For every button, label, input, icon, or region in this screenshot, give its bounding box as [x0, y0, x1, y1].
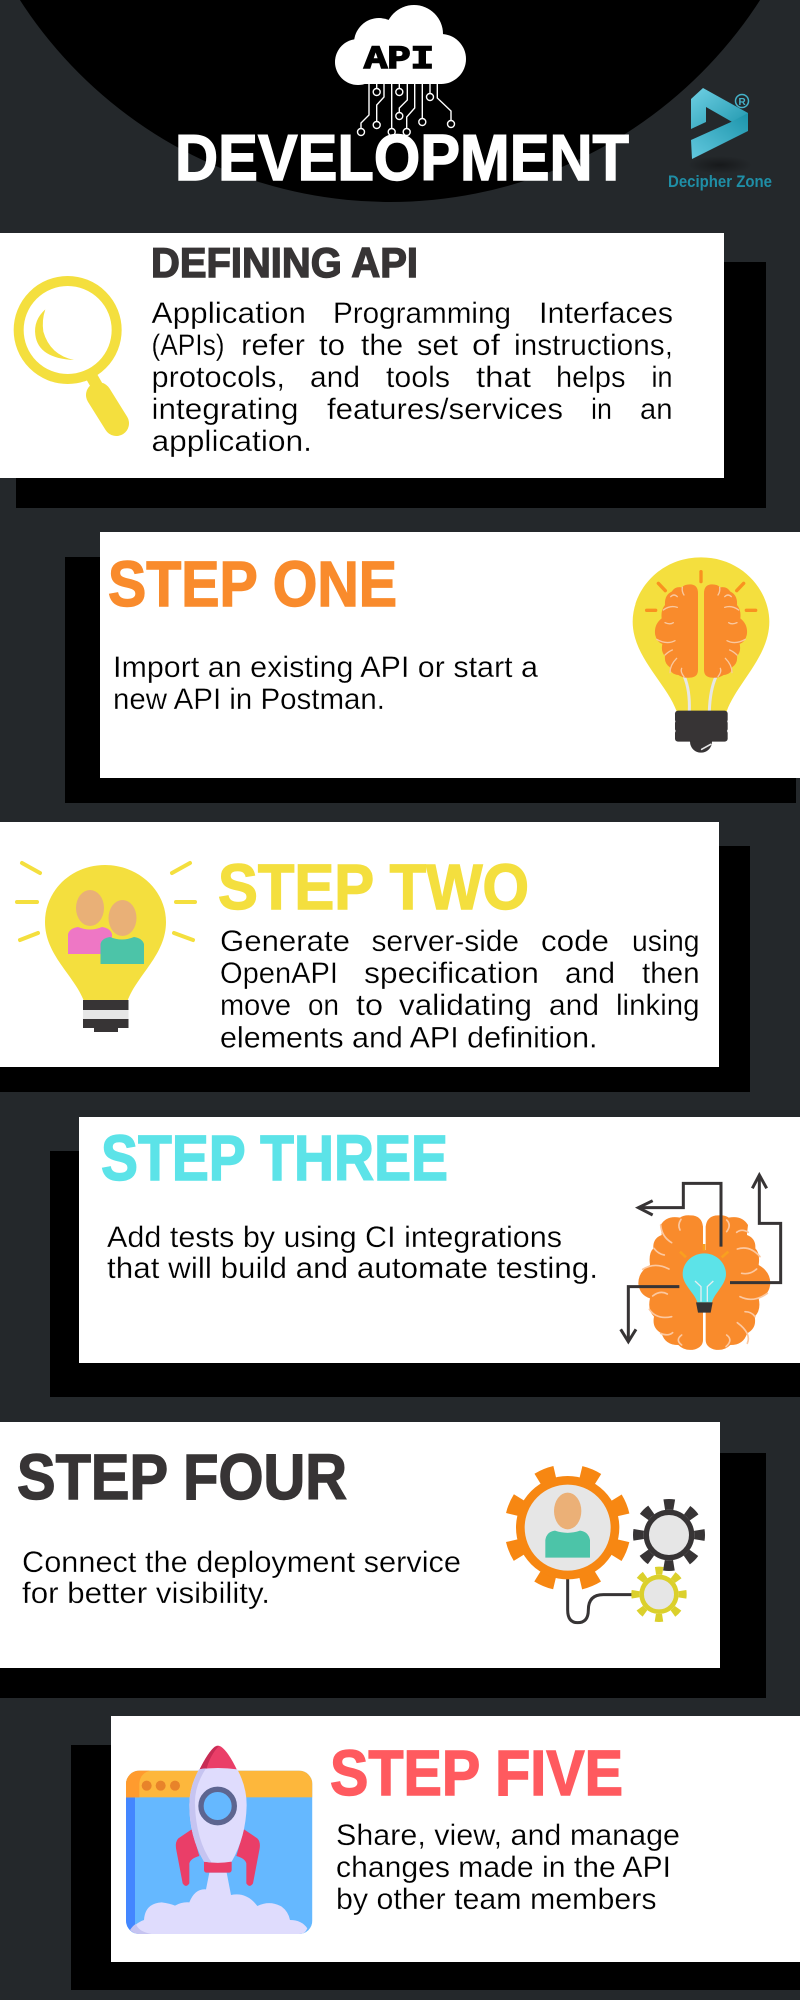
- icon: rocket launching from browser window: [126, 1746, 312, 1934]
- heading: STEP FOUR: [17, 1441, 347, 1513]
- text block: that: [476, 361, 531, 394]
- text block: to: [356, 989, 383, 1022]
- text block: Programming: [333, 297, 511, 330]
- icon: API cloud: [335, 5, 466, 136]
- logo: Decipher Zone: R: [738, 97, 746, 108]
- text block: on: [308, 989, 339, 1022]
- text block: and: [310, 361, 360, 394]
- text block: to: [319, 329, 345, 362]
- text block: OpenAPI: [220, 957, 338, 990]
- text block: (APIs): [152, 329, 224, 362]
- panel: step five: [71, 1716, 800, 1990]
- text block: Import an existing API or start a: [113, 651, 539, 684]
- text block: and: [565, 957, 615, 990]
- icon: brain with bulb and arrows: [621, 1175, 781, 1350]
- text block: move: [220, 989, 291, 1022]
- panel: step one: [65, 532, 800, 803]
- text block: Application: [152, 297, 306, 330]
- heading: STEP THREE: [101, 1122, 448, 1194]
- title: DEVELOPMENT: [175, 121, 629, 194]
- text block: set: [417, 329, 458, 362]
- text block: Generate: [220, 925, 350, 958]
- text block: in: [652, 361, 672, 394]
- text block: code: [541, 925, 609, 958]
- text block: [220, 925, 700, 1054]
- panel: step four: [0, 1422, 766, 1698]
- text block: helps: [556, 361, 626, 394]
- text block: Interfaces: [539, 297, 673, 330]
- text block: an: [640, 393, 672, 426]
- text block: [152, 297, 673, 458]
- text block: application.: [152, 425, 312, 458]
- panel: defining API: [0, 233, 766, 508]
- text block: by other team members: [336, 1883, 656, 1916]
- text block: features/services: [327, 393, 563, 426]
- text block: that will build and automate testing.: [107, 1252, 598, 1285]
- text block: for better visibility.: [22, 1577, 270, 1610]
- text block: the: [361, 329, 403, 362]
- text block: in: [591, 393, 612, 426]
- icon: light bulb with brain: [633, 557, 769, 753]
- text block: server-side: [372, 925, 519, 958]
- heading: DEFINING API: [151, 239, 418, 286]
- panel: step two: [0, 822, 750, 1092]
- text block: [113, 651, 539, 716]
- header black circle: [0, 0, 800, 202]
- text block: Share, view, and manage: [336, 1819, 680, 1852]
- text block: Connect the deployment service: [22, 1546, 461, 1579]
- text block: new API in Postman.: [113, 683, 385, 716]
- text block: then: [642, 957, 700, 990]
- text block: elements and API definition.: [220, 1022, 598, 1054]
- heading: STEP FIVE: [330, 1737, 623, 1809]
- text block: using: [632, 925, 700, 958]
- heading: STEP TWO: [218, 851, 529, 923]
- text block: [336, 1819, 680, 1916]
- text block: linking: [616, 989, 700, 1022]
- logo: Decipher Zone: Decipher Zone: [668, 173, 772, 191]
- text block: specification: [364, 957, 539, 990]
- text block: instructions,: [514, 329, 673, 362]
- text block: Add tests by using CI integrations: [107, 1221, 562, 1254]
- text block: validating: [399, 989, 532, 1022]
- text block: [107, 1221, 598, 1285]
- text block: [22, 1546, 461, 1610]
- text block: refer: [241, 329, 305, 362]
- icon: gears with person: [500, 1460, 704, 1623]
- text block: tools: [386, 361, 450, 394]
- icon: light bulb with people: [17, 863, 195, 1032]
- text block: and: [549, 989, 599, 1022]
- text block: integrating: [152, 393, 298, 426]
- icon: magnifying glass: [19, 281, 117, 423]
- text block: of: [472, 329, 501, 362]
- icon: API cloud: API: [364, 41, 434, 78]
- panel: step three: [50, 1117, 800, 1397]
- text block: changes made in the API: [336, 1851, 671, 1884]
- text block: protocols,: [152, 361, 285, 394]
- logo: Decipher Zone: [668, 88, 772, 191]
- heading: STEP ONE: [108, 548, 397, 620]
